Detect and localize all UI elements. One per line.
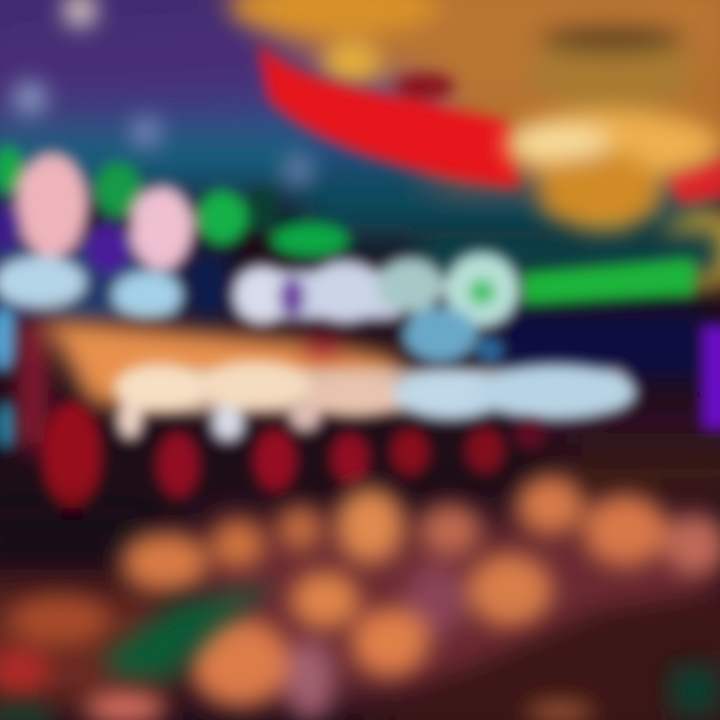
top gold chandelier	[14, 0, 440, 184]
dark brown table edge	[350, 590, 720, 720]
table highlight	[526, 665, 720, 720]
checker pattern of diamonds	[0, 146, 350, 449]
red curved band	[258, 42, 720, 205]
orange sign band	[18, 318, 400, 450]
green felt table	[0, 585, 275, 720]
white sign letters	[232, 252, 520, 364]
white sign text line	[114, 361, 637, 442]
ceiling: purple to blue	[0, 0, 720, 240]
purple edge light	[702, 325, 720, 430]
red seats row	[42, 401, 546, 509]
large gold chandelier	[504, 28, 720, 288]
bottom orange crowd blobs	[0, 475, 720, 720]
mid dark band right	[185, 230, 720, 445]
green bar	[522, 258, 695, 306]
bottom dark floor	[0, 455, 720, 710]
